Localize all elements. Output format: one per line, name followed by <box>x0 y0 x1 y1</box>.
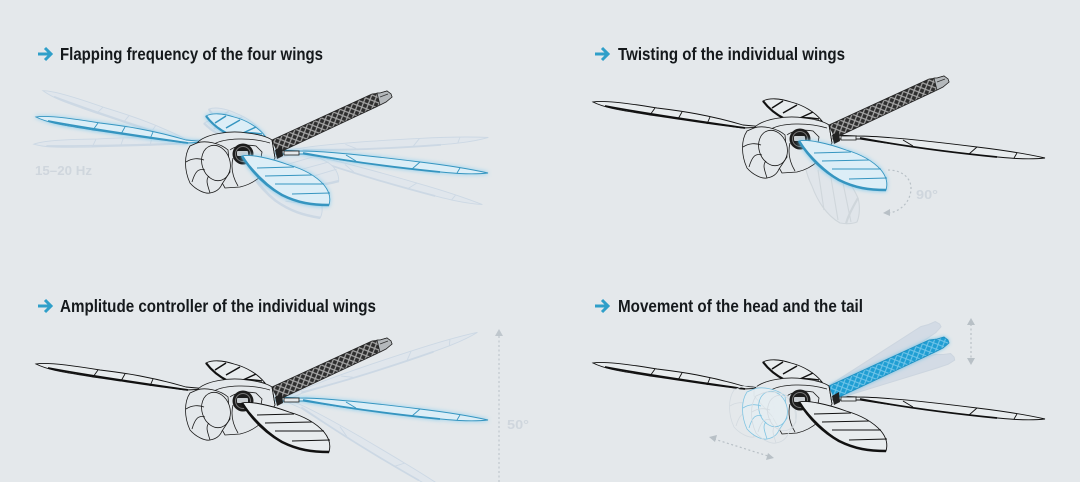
panel: amplitude <box>36 296 529 482</box>
head arrow <box>709 435 774 460</box>
panel: twisting <box>593 44 1045 224</box>
panel: flapping frequency <box>34 44 489 218</box>
heading: amplitude: Amplitude controller of the individual wings <box>60 296 376 316</box>
blue wings <box>36 114 488 174</box>
tail arrow <box>967 318 975 365</box>
heading: twisting: Twisting of the individual wings <box>618 44 845 64</box>
arc arrow <box>883 170 911 216</box>
ghost twisted wing <box>805 150 859 224</box>
amplitude arrow <box>495 329 503 482</box>
label: 90°: 90° <box>916 187 938 202</box>
label: 50°: 50° <box>507 417 529 432</box>
body <box>186 132 299 193</box>
panel: head and tail <box>593 296 1045 460</box>
dragonfly <box>36 311 488 482</box>
front wing <box>242 155 330 205</box>
dragonfly <box>593 321 1045 451</box>
ghost wings <box>34 90 489 218</box>
heading: head and tail: Movement of the head and the tail <box>618 296 863 316</box>
label: 15–20 Hz: 15–20 Hz <box>35 163 93 178</box>
tail <box>272 91 392 153</box>
heading: flapping frequency: Flapping frequency of the four wings <box>60 44 323 64</box>
dragonfly <box>593 76 1045 190</box>
